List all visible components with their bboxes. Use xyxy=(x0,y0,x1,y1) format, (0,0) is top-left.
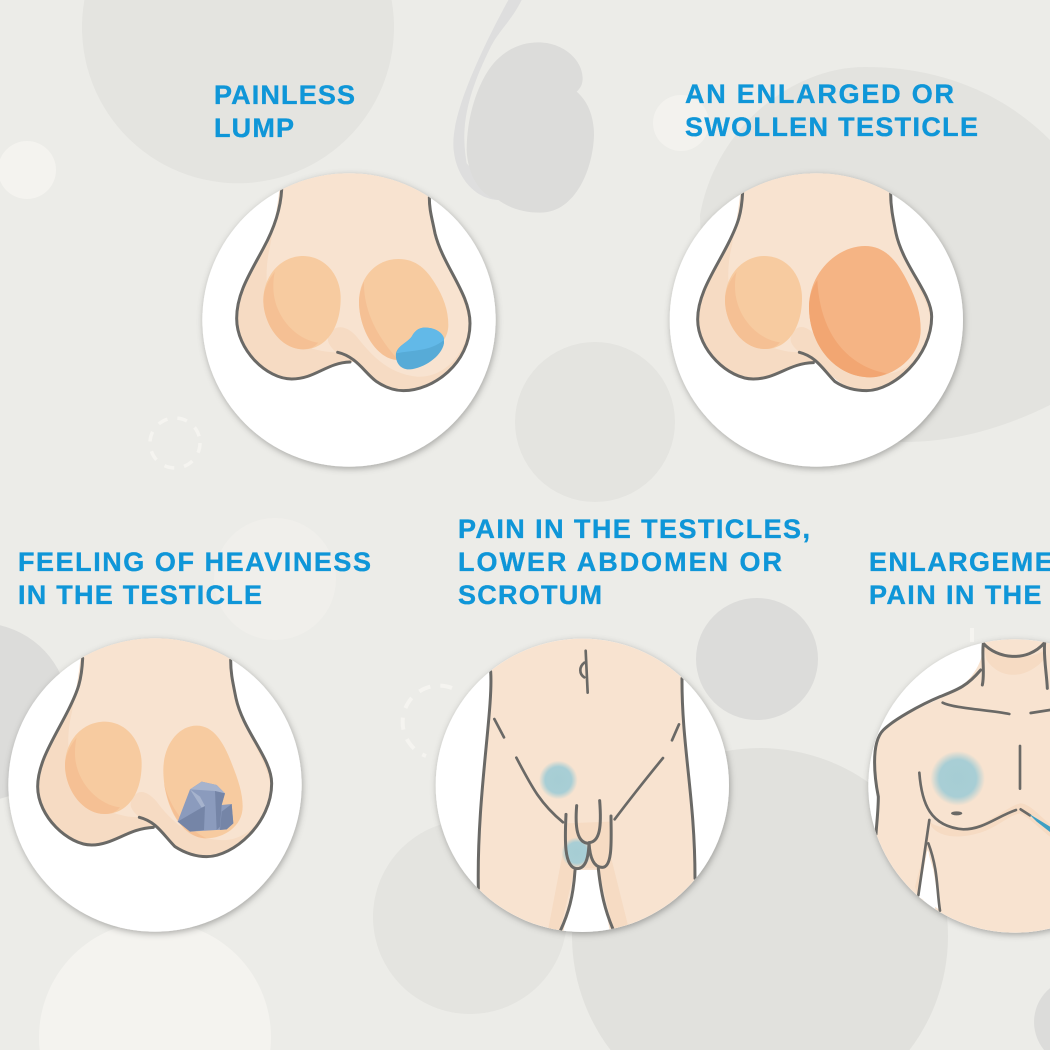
neck and pectoral shading xyxy=(984,647,1044,674)
body skin xyxy=(478,630,696,950)
pain spot xyxy=(930,751,985,806)
chest skin xyxy=(876,640,1050,932)
scrotum outline xyxy=(38,658,272,857)
heading: pain in testicles: SCROTUM xyxy=(458,580,602,610)
heading: pain in testicles: PAIN IN THE TESTICLES, xyxy=(458,514,810,544)
crotch shading xyxy=(548,822,628,930)
left testicle xyxy=(725,256,802,349)
scrotum skin xyxy=(237,170,470,391)
scrotum outline xyxy=(237,189,470,391)
icon: lump xyxy=(396,328,444,369)
heading: painless lump: PAINLESS xyxy=(214,80,355,110)
left testicle xyxy=(65,722,142,814)
right-side pain marker xyxy=(1028,813,1050,832)
pain spots xyxy=(539,761,592,868)
heading: painless lump: LUMP xyxy=(214,113,294,143)
enlarged right testicle xyxy=(809,246,921,377)
heading: pain in testicles: LOWER ABDOMEN OR xyxy=(458,547,782,577)
icon: rock xyxy=(178,782,233,832)
panel: enlarged testicle xyxy=(670,170,963,467)
panel: painless lump xyxy=(202,170,496,467)
panel: breast pain xyxy=(868,630,1050,950)
left testicle xyxy=(263,256,341,349)
heading: pain in testicles xyxy=(458,514,810,610)
scrotum outline xyxy=(698,192,932,391)
right testicle xyxy=(163,726,243,838)
torso lines xyxy=(875,643,1047,834)
panel: groin pain xyxy=(436,630,729,950)
heading: heaviness: FEELING OF HEAVINESS xyxy=(18,547,371,577)
heading: enlarged testicle: AN ENLARGED OR xyxy=(685,79,954,109)
body lines xyxy=(478,672,695,888)
heading: heaviness: IN THE TESTICLE xyxy=(18,580,262,610)
heading: enlarged testicle xyxy=(685,79,978,142)
heading: breast enlargement xyxy=(869,547,1050,610)
heading: painless lump xyxy=(214,80,355,143)
scrotum skin xyxy=(698,170,932,391)
panel: heaviness xyxy=(8,637,302,932)
icon: background testicle silhouette xyxy=(453,0,594,213)
heading: heaviness xyxy=(18,547,371,610)
right testicle xyxy=(359,259,448,360)
white gap under arm xyxy=(919,850,938,909)
scrotum skin xyxy=(38,637,272,857)
heading: enlarged testicle: SWOLLEN TESTICLE xyxy=(685,112,978,142)
